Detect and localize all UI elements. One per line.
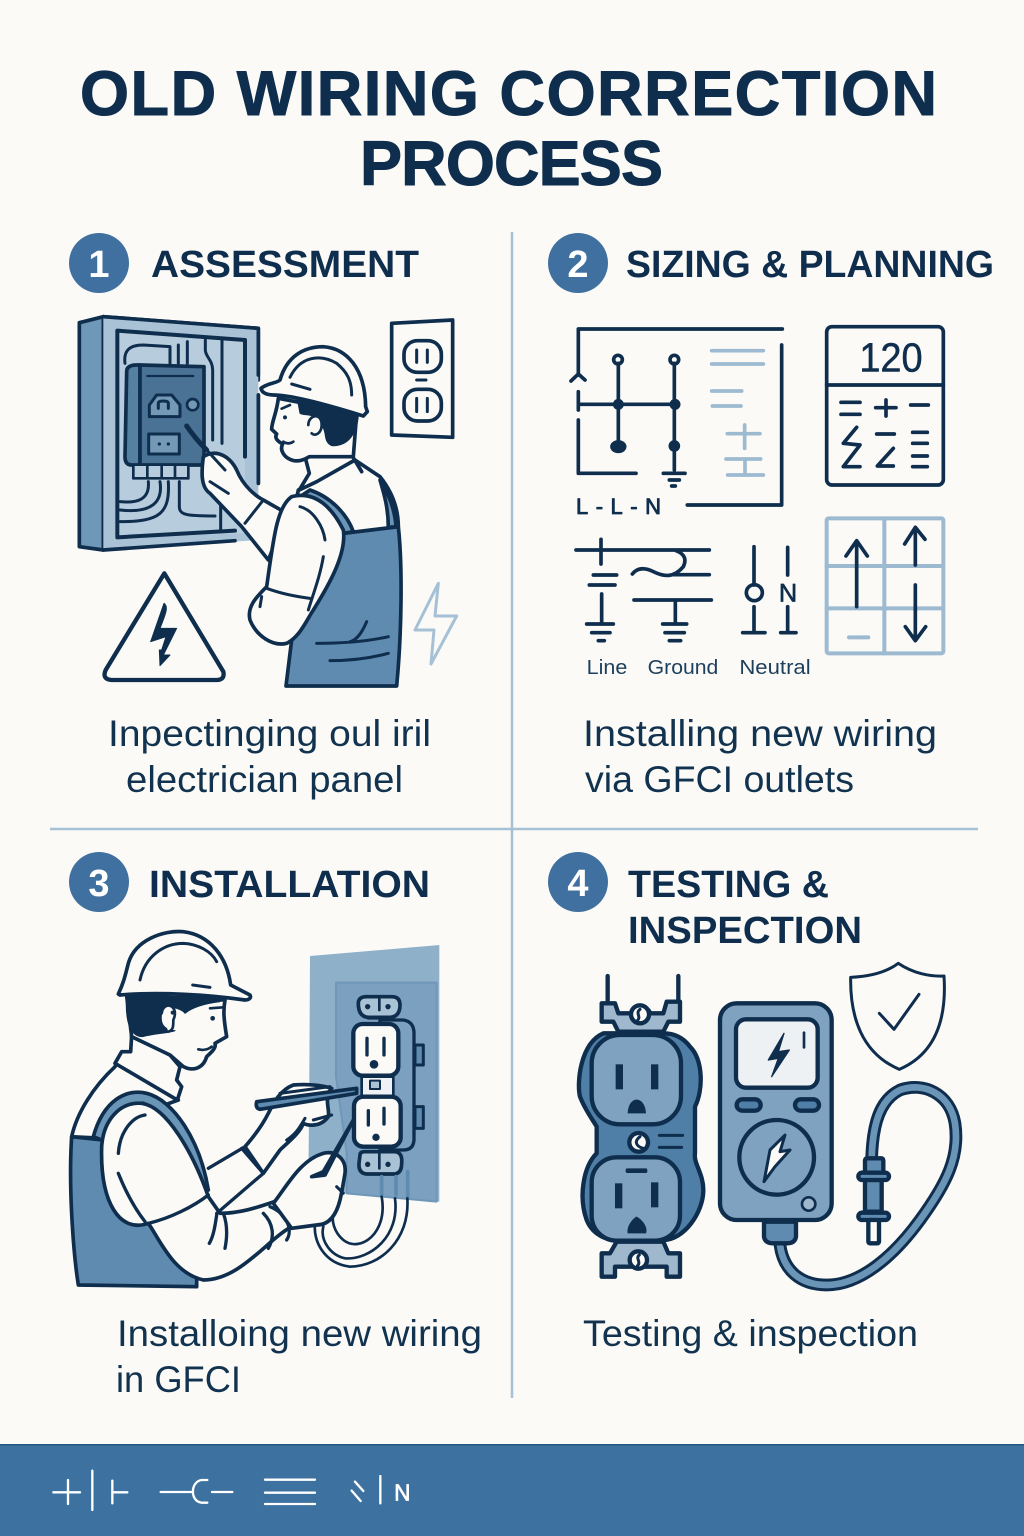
step 1 heading (69, 233, 419, 293)
step 4 heading (548, 852, 862, 952)
step 4 heading: 4 (567, 863, 589, 905)
icon: cord and plug (780, 1087, 956, 1285)
icon: multimeter (720, 1003, 832, 1243)
illustration: electrician installing outlet (71, 931, 439, 1287)
caption 4: Testing & inspection (583, 1313, 918, 1354)
symbol labels (587, 656, 811, 679)
grid with arrows (827, 518, 943, 653)
neutral symbols (743, 547, 797, 633)
step 2 heading: 2 (567, 244, 589, 286)
step 4 heading: INSPECTION (628, 910, 862, 952)
step 3 heading: 3 (88, 863, 110, 905)
footer schematic symbols (53, 1471, 411, 1510)
footer band (0, 1444, 1024, 1536)
wiring diagram: L-L-N (576, 494, 661, 519)
icon: warning triangle (105, 573, 224, 680)
icon: worker (71, 931, 357, 1287)
illustration: test equipment (579, 963, 956, 1285)
icon: shield check (851, 963, 944, 1069)
step 1 heading: ASSESSMENT (151, 244, 419, 286)
icon: calculator: 120 (859, 335, 923, 381)
icon: calculator (827, 327, 943, 485)
symbol labels: Neutral (739, 656, 811, 679)
wiring diagram (571, 329, 782, 519)
icon: lightning bolt (415, 583, 457, 664)
caption 2 (583, 713, 937, 800)
step 3 heading: INSTALLATION (149, 864, 430, 906)
caption 3 (116, 1313, 482, 1400)
caption 1: electrician panel (126, 759, 403, 800)
line and ground symbols (576, 539, 711, 641)
icon: electrical panel (79, 317, 258, 550)
schematic diagrams (571, 327, 943, 679)
title: OLD WIRING CORRECTION (80, 59, 937, 129)
wire coil (315, 1197, 407, 1267)
panel: installation (69, 852, 482, 1400)
panel: sizing and planning (548, 233, 994, 800)
neutral symbols: N (779, 580, 797, 608)
panel: assessment (69, 233, 457, 800)
panel: testing and inspection (548, 852, 956, 1354)
title (80, 59, 937, 199)
step 2 heading (548, 233, 994, 293)
icon: duplex outlet (579, 976, 703, 1277)
caption 2: Installing new wiring (583, 713, 937, 754)
caption 2: via GFCI outlets (585, 759, 854, 800)
caption 3: in GFCI (116, 1359, 241, 1400)
step 4 heading: TESTING & (628, 864, 829, 906)
caption 1 (108, 713, 431, 800)
step 3 heading (69, 852, 430, 912)
icon: wall outlet (392, 320, 453, 437)
symbol labels: Ground (648, 656, 718, 679)
icon: worker (187, 347, 401, 686)
footer schematic symbols: N (394, 1479, 411, 1505)
step 1 heading: 1 (88, 244, 110, 286)
title: PROCESS (360, 129, 663, 199)
symbol labels: Line (587, 656, 627, 679)
caption 1: Inpectinging oul iril (108, 713, 431, 754)
illustration: electrician at panel (79, 317, 457, 686)
caption 3: Installoing new wiring (117, 1313, 482, 1354)
icon: wall plate and outlet (308, 945, 439, 1202)
step 2 heading: SIZING & PLANNING (626, 244, 994, 286)
